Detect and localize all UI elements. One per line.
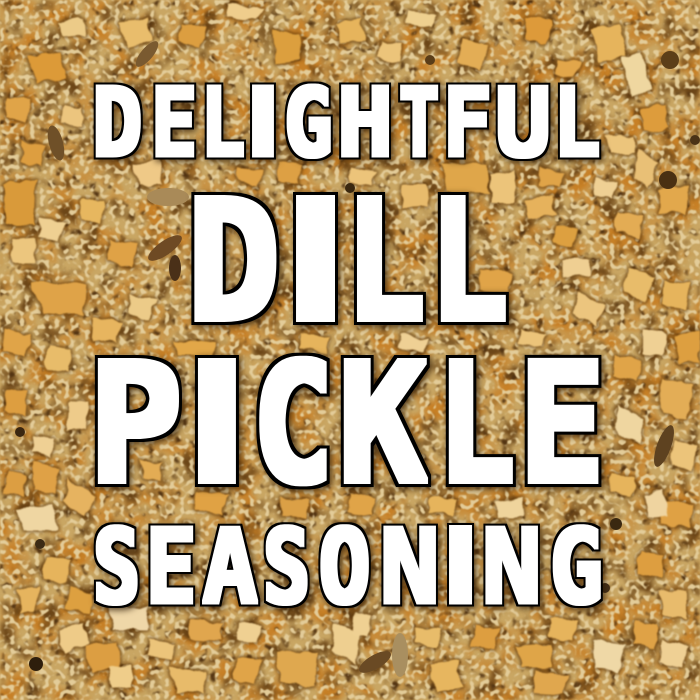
title line: DELIGHTFUL: G — [284, 67, 333, 178]
title line: SEASONING — [93, 503, 603, 628]
title line: SEASONING: G — [550, 507, 603, 627]
title line: SEASONING: N — [380, 507, 440, 627]
title line: PICKLE: C — [252, 328, 334, 520]
title: Delightful Dill Pickle Seasoning — [88, 65, 605, 628]
title line: PICKLE: E — [519, 329, 605, 521]
title line: SEASONING: E — [146, 508, 197, 628]
title line: DELIGHTFUL: U — [495, 69, 551, 179]
title line: PICKLE — [88, 324, 605, 521]
title line: DILL: I — [284, 160, 347, 357]
title line: DILL: L — [430, 166, 508, 359]
title line: SEASONING: O — [318, 508, 371, 627]
title line: DELIGHTFUL — [92, 65, 600, 179]
title line: DELIGHTFUL: H — [337, 69, 393, 179]
title line: SEASONING: S — [93, 507, 140, 627]
title line: DELIGHTFUL: E — [151, 69, 197, 179]
title line: DELIGHTFUL: L — [201, 68, 245, 179]
title line: PICKLE: L — [438, 328, 515, 520]
title line: DELIGHTFUL: L — [553, 68, 600, 178]
title line: SEASONING: A — [202, 507, 258, 627]
title line: DILL: L — [345, 167, 425, 359]
title line: PICKLE: I — [186, 324, 248, 519]
title line: DELIGHTFUL: I — [246, 65, 280, 177]
title line: SEASONING: S — [263, 507, 310, 627]
title line: DELIGHTFUL: D — [92, 69, 142, 179]
title line: PICKLE: K — [338, 328, 426, 520]
title line: SEASONING: I — [442, 503, 479, 626]
title line: DELIGHTFUL: F — [443, 68, 492, 178]
title line: DELIGHTFUL: T — [399, 69, 439, 179]
title line: SEASONING: N — [482, 507, 542, 627]
title line: DILL: D — [187, 165, 280, 358]
title line: PICKLE: P — [88, 328, 183, 520]
title line: DILL — [187, 160, 508, 359]
